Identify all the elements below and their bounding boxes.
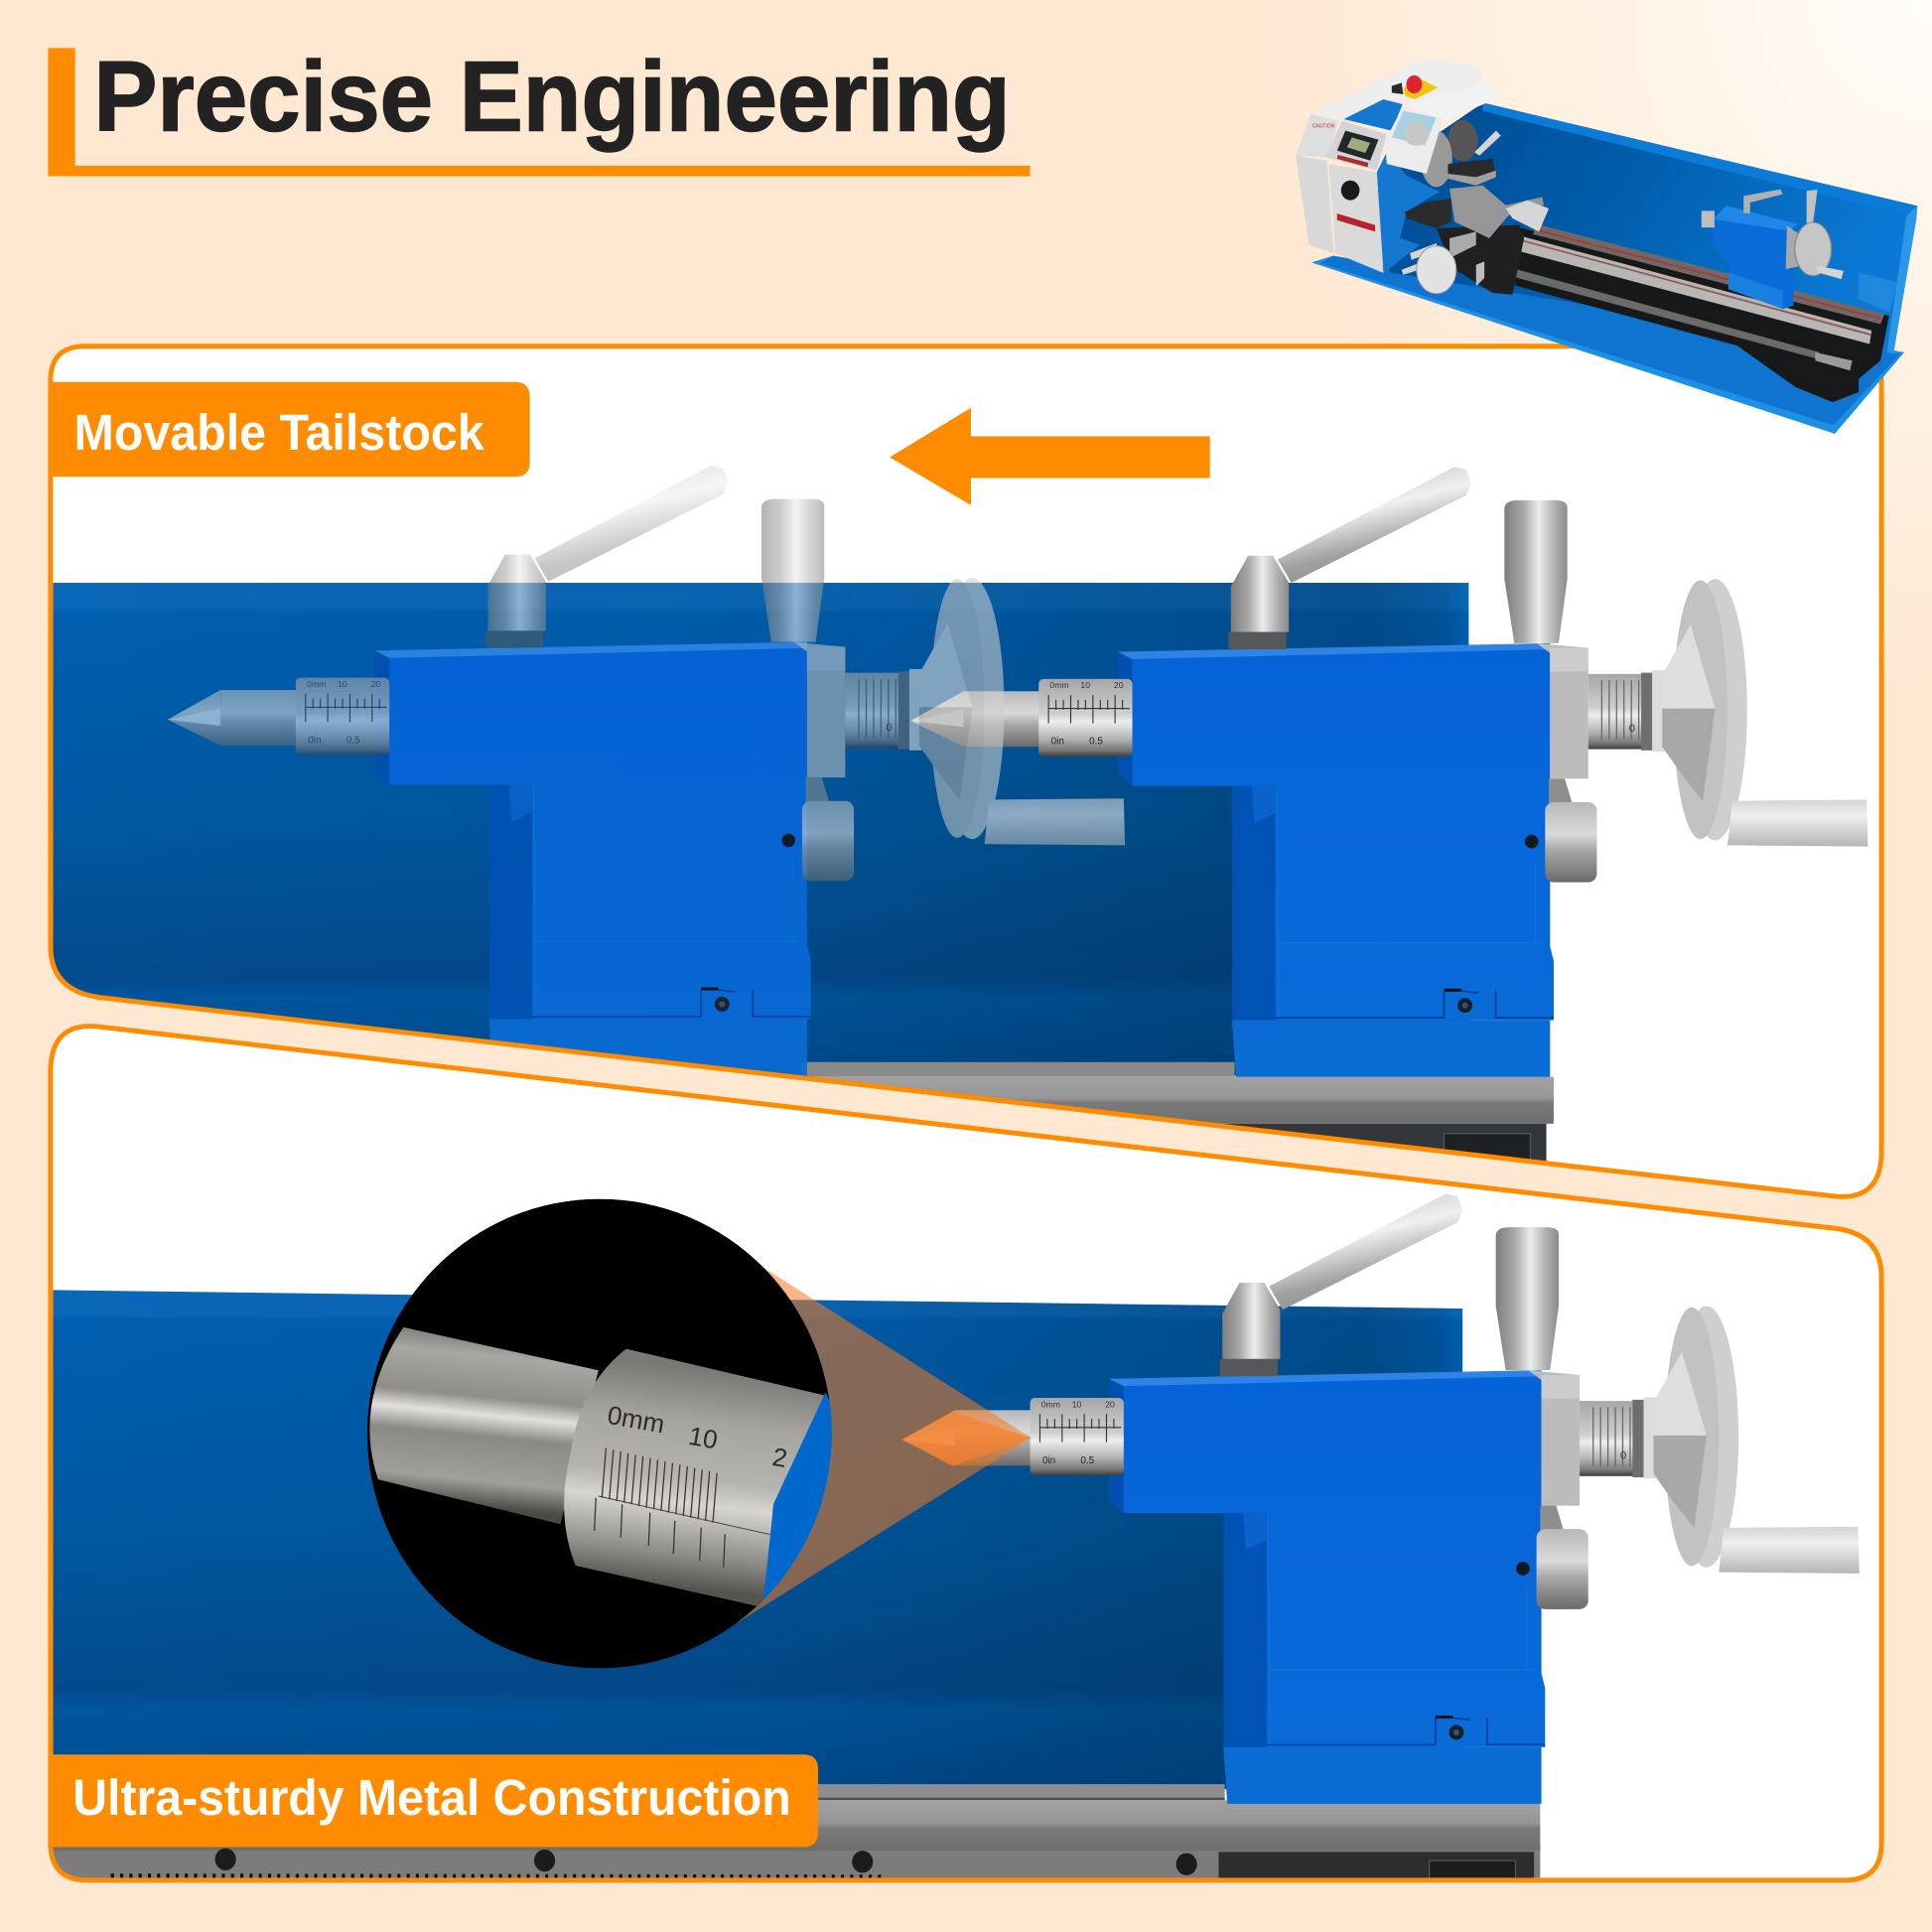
tailstock: ghost previous position: 0in [308, 735, 322, 746]
label: movable tailstock [51, 382, 530, 477]
tailstock: current position: 0 [1629, 723, 1635, 735]
tailstock quill with scale: 10 [1072, 1399, 1082, 1409]
panel 1 photo: tailstock moving along bed [53, 466, 1867, 1173]
tailstock: current position: 0.5 [1089, 737, 1103, 748]
lathe headstock and carriage [1296, 58, 1549, 295]
tailstock: ghost previous position: 0.5 [346, 735, 360, 746]
orange zoom cone [740, 1262, 1032, 1621]
tailstock: current position: 20 [1114, 680, 1124, 690]
panel: movable tailstock [51, 346, 1881, 1196]
lathe tray, back panel and bed [1311, 103, 1917, 434]
tailstock: ghost previous position: 0mm [307, 679, 326, 689]
tailstock: current position: 0in [1051, 737, 1064, 748]
tailstock: ghost previous position [168, 466, 1125, 1075]
label: ultra-sturdy metal construction: Ultra-sturdy Metal Construction [72, 1769, 791, 1826]
tailstock: ghost previous position: 0 [886, 722, 893, 734]
magnifier circle with micrometer close-up: 0mm [606, 1400, 667, 1439]
tailstock quill with scale: 0mm [1041, 1399, 1060, 1409]
arrow pointing left [890, 408, 1210, 505]
tailstock quill with scale [901, 1398, 1124, 1475]
tailstock: current position: 0mm [1049, 680, 1069, 690]
tailstock: current position [910, 467, 1867, 1077]
panel: ultra-sturdy metal construction [51, 1027, 1881, 1882]
tailstock quill with scale: 0in [1042, 1455, 1055, 1466]
title bracket [48, 48, 1031, 176]
tailstock: current position: 10 [1080, 680, 1090, 690]
magnifier circle with micrometer close-up [367, 1199, 850, 1668]
tailstock quill with scale: 0.5 [1080, 1455, 1095, 1466]
dial zero mark: 0 [1620, 1449, 1626, 1461]
tailstock: ghost previous position: 10 [338, 679, 347, 689]
label: movable tailstock: Movable Tailstock [73, 404, 484, 461]
full lathe product photo [1296, 58, 1917, 434]
bed screws [215, 1849, 1197, 1875]
panel 2 photo: lathe bed and tailstock [53, 1194, 1860, 1882]
lathe tailstock [1702, 190, 1844, 309]
label: ultra-sturdy metal construction [51, 1754, 818, 1847]
magnifier circle with micrometer close-up: 2 [770, 1442, 789, 1473]
tailstock [1109, 1194, 1860, 1804]
magnifier circle with micrometer close-up: 10 [686, 1421, 720, 1454]
lathe headstock and carriage: CAUTION [1312, 123, 1335, 129]
orange highlighted tip [901, 1412, 1032, 1466]
tailstock quill with scale: 20 [1105, 1399, 1115, 1409]
panel 1 outline [51, 346, 1881, 1196]
panel 2 outline [51, 1027, 1881, 1880]
tailstock: ghost previous position: 20 [371, 679, 380, 689]
title: Precise Engineering [93, 42, 1011, 153]
